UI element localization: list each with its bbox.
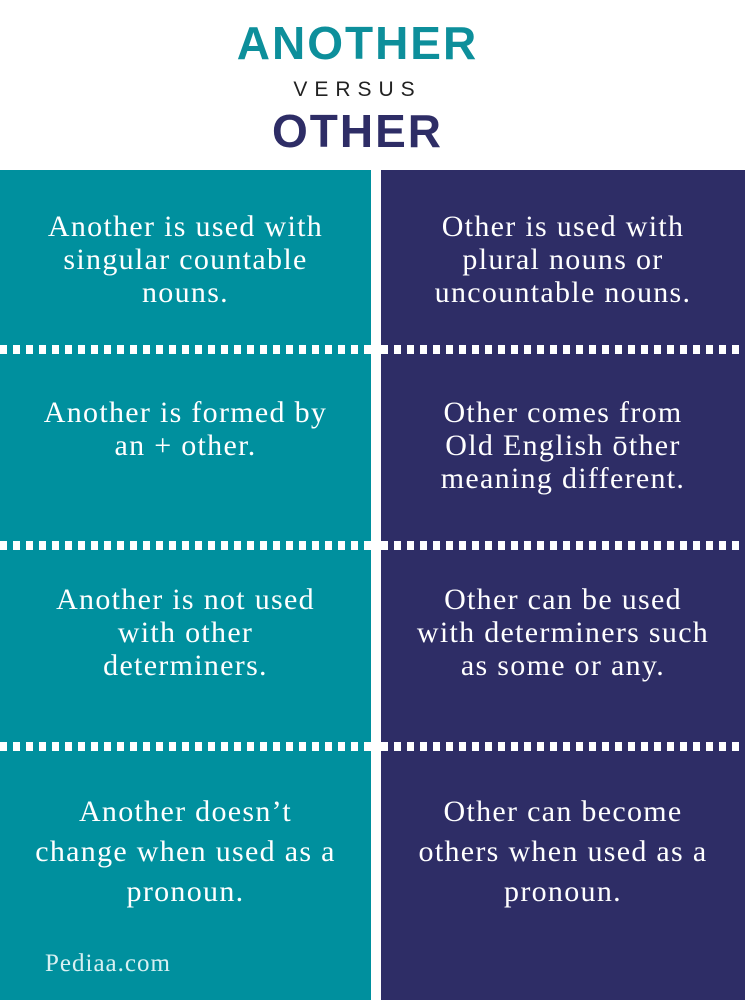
text: another 3: [56, 583, 315, 682]
title: another: ANOTHER: [237, 17, 478, 69]
panel: another: [0, 170, 371, 1000]
text: another 2: [44, 396, 327, 462]
text: another 4: change when used as a: [35, 835, 336, 868]
text: other 3: as some or any.: [461, 649, 665, 682]
text: other 4: pronoun.: [504, 875, 622, 908]
title: other: OTHER: [272, 105, 443, 157]
text: other 4: Other can become: [443, 795, 683, 828]
text: other 1: Other is used with: [442, 210, 684, 243]
text: another 3: with other: [118, 616, 253, 649]
text: another 3: determiners.: [103, 649, 268, 682]
text: other 1: plural nouns or: [462, 243, 664, 276]
text: other 4: [419, 795, 707, 908]
text: another 1: Another is used with: [48, 210, 323, 243]
text: other 2: meaning different.: [441, 462, 685, 495]
text: other 4: others when used as a: [419, 835, 707, 868]
text: other 2: [441, 396, 685, 495]
text: other 3: [416, 583, 709, 682]
text: another 2: an + other.: [114, 429, 257, 462]
text: other 2: Other comes from: [443, 396, 683, 429]
text: another 4: Another doesn’t: [79, 795, 292, 828]
text: other 3: Other can be used: [444, 583, 682, 616]
text: another 1: [48, 210, 323, 309]
logo: Pediaa.com: [45, 950, 171, 977]
text: another 4: pronoun.: [127, 875, 244, 908]
text: other 3: with determiners such: [417, 616, 709, 649]
text: another 4: [35, 795, 336, 908]
text: another 3: Another is not used: [56, 583, 315, 616]
text: another 1: nouns.: [142, 276, 229, 309]
text: other 1: [435, 210, 691, 309]
panel: other: [381, 170, 745, 1000]
title: versus: VERSUS: [293, 78, 422, 101]
text: another 2: Another is formed by: [44, 396, 327, 429]
text: other 2: Old English ōther: [445, 429, 681, 462]
text: another 1: singular countable: [63, 243, 308, 276]
text: other 1: uncountable nouns.: [435, 276, 691, 309]
